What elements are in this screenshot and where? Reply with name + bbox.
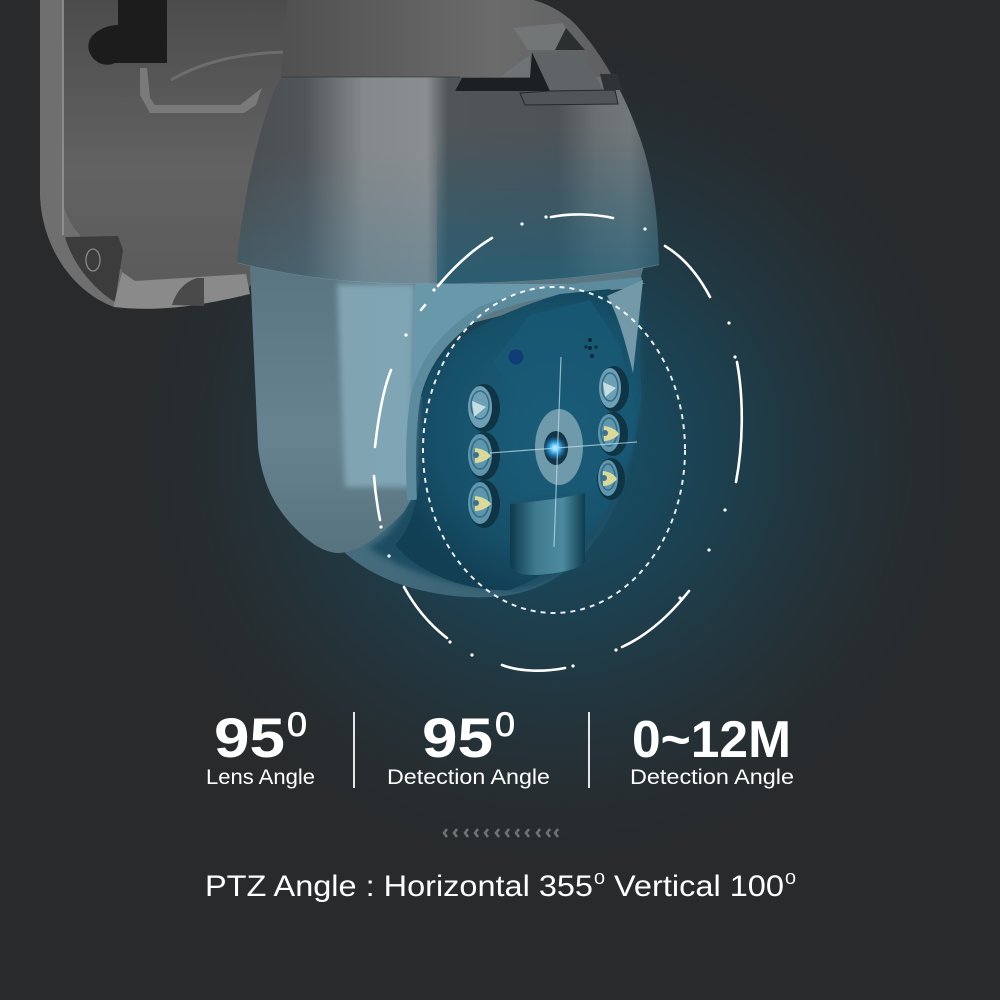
LED left bottom — [468, 480, 500, 528]
LED right bottom — [597, 458, 625, 500]
LED left top — [468, 384, 500, 432]
face side wedge — [607, 280, 643, 373]
camera under-body — [345, 285, 642, 597]
stat: detection distance: 0~12M — [632, 711, 791, 769]
wall bracket — [40, 0, 300, 309]
LED left middle — [468, 432, 500, 480]
stat: lens angle: 0 — [287, 706, 307, 744]
body upper right — [412, 282, 645, 400]
stat: detection distance: Detection Angle — [630, 766, 794, 789]
stat: detection angle: Detection Angle — [387, 766, 550, 789]
infographic canvas — [40, 0, 889, 902]
bracket corner plate — [65, 236, 123, 302]
chevron row — [444, 829, 558, 837]
stat: detection angle: 95 — [422, 706, 493, 769]
LED right top — [599, 366, 629, 412]
dome latch — [455, 23, 622, 105]
PTZ angle caption: PTZ Angle : Horizontal 355 — [205, 870, 593, 903]
PTZ angle caption: 0 — [785, 871, 796, 888]
camera face rim — [411, 282, 642, 500]
stat: detection angle: 0 — [495, 706, 515, 744]
stat divider — [353, 712, 355, 788]
camera dome — [230, 0, 670, 290]
lens crosshair — [490, 357, 637, 547]
blue indicator — [508, 350, 524, 364]
icon: microphone dots — [584, 338, 598, 358]
LED right middle — [598, 412, 628, 456]
outer detection arcs — [374, 214, 742, 671]
stat divider — [588, 712, 590, 788]
PTZ angle caption: Vertical 100 — [614, 870, 784, 903]
stat: lens angle: Lens Angle — [206, 766, 315, 789]
bracket lower band — [114, 272, 250, 309]
icon: bracket screw — [86, 249, 100, 271]
PTZ angle caption — [205, 870, 796, 903]
bracket L-shaped ridge — [140, 68, 262, 113]
camera front face — [395, 289, 641, 590]
arc marker dots — [379, 215, 737, 668]
stat: lens angle: 95 — [214, 706, 285, 769]
bracket clamp — [88, 0, 167, 65]
camera lens — [535, 409, 583, 485]
face inner plate — [493, 300, 636, 497]
stat: lens angle — [206, 706, 315, 789]
dome neck — [283, 0, 611, 77]
body highlight — [337, 284, 415, 487]
camera body pill — [250, 262, 645, 553]
sensor cylinder — [510, 493, 585, 575]
PTZ angle caption: 0 — [594, 871, 605, 888]
stat: detection angle — [387, 706, 550, 789]
dashed detection circle — [423, 287, 685, 613]
